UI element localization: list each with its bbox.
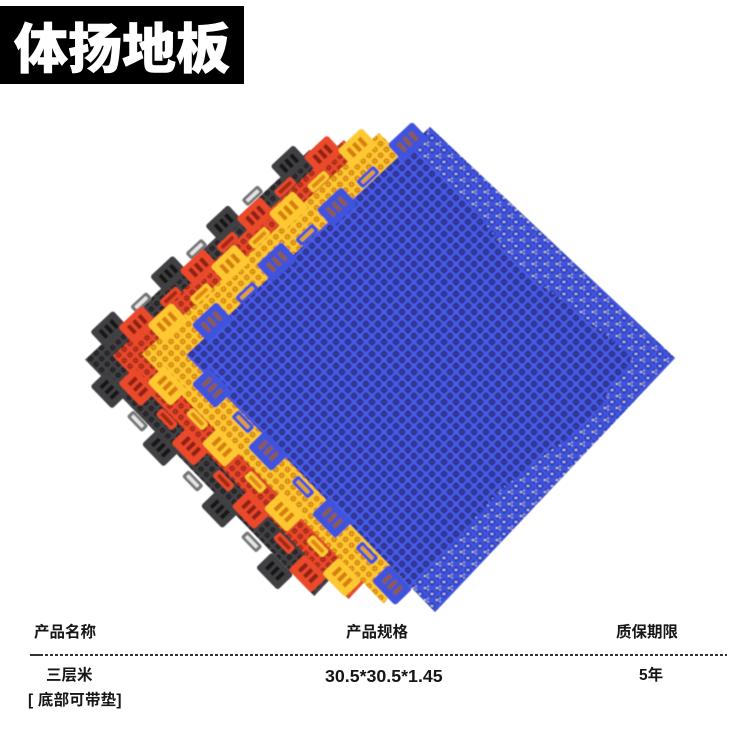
column heading: product size: 产品规格 bbox=[346, 624, 408, 641]
warranty value: 5年 bbox=[639, 667, 663, 684]
title banner: 体扬地板 bbox=[14, 5, 230, 84]
column heading: warranty: 质保期限 bbox=[616, 624, 678, 641]
red tile bbox=[113, 135, 576, 599]
blue tile bbox=[186, 122, 675, 612]
black tile bbox=[85, 145, 535, 596]
spec table bbox=[28, 624, 727, 709]
product name note: [ 底部可带垫] bbox=[28, 692, 122, 709]
table divider bbox=[30, 654, 727, 656]
yellow tile bbox=[142, 128, 616, 603]
product size value: 30.5*30.5*1.45 bbox=[325, 666, 443, 686]
column heading: product name: 产品名称 bbox=[34, 624, 96, 641]
product name value: 三层米 bbox=[46, 667, 93, 684]
